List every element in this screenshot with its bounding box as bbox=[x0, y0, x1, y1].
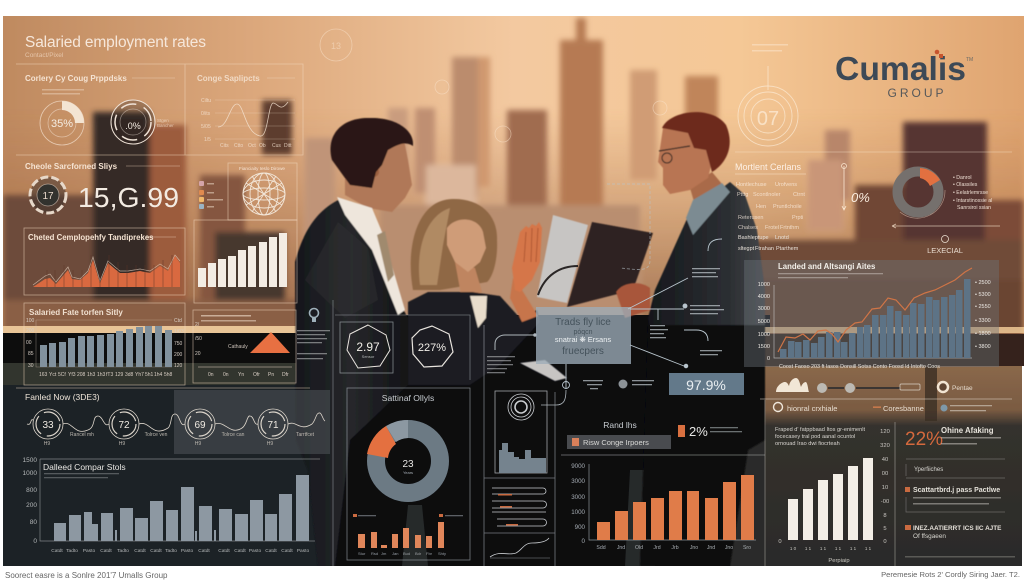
background: blurred city skyline bbox=[3, 16, 1024, 336]
chart: large grey bars: Tadto bbox=[66, 548, 78, 554]
stat: 0% with vertical arrow bbox=[842, 164, 870, 210]
chart: orange triangle: 2/ bbox=[195, 322, 200, 328]
chart: orange bars: Jno bbox=[690, 545, 698, 551]
panel: white bars chart: 5 bbox=[883, 526, 887, 532]
logo: TM bbox=[966, 57, 973, 63]
stat: 22% and text list: 22% bbox=[905, 429, 943, 450]
panel: white bars chart: 320 bbox=[880, 443, 890, 449]
panel: timeline with dials: H9 bbox=[267, 441, 273, 447]
chart: market donut: Sanrsiroi ssian bbox=[957, 205, 991, 211]
icon: bulb and note bbox=[297, 308, 330, 359]
panel: timeline with dials: H9 bbox=[44, 441, 50, 447]
stat: 22% and text list: INEZ.AATIERRT ICS IIC AJTE bbox=[913, 525, 1002, 532]
chart: slate bars: Yct bbox=[49, 372, 57, 378]
chart: orange bars: Rand lhs bbox=[603, 420, 637, 430]
progress rows bbox=[492, 488, 547, 526]
chart: orange triangle: Cathauly bbox=[228, 344, 248, 350]
panel: white bars chart: 8 bbox=[883, 513, 887, 519]
dial: 69 bbox=[185, 409, 215, 439]
icon: dial bbox=[30, 177, 66, 213]
stat: 2.7%: 227% bbox=[418, 342, 446, 354]
dial: 71 bbox=[258, 409, 288, 439]
gauge: 0%: .0% bbox=[125, 121, 141, 131]
legend strip: Coresbanne bbox=[883, 404, 924, 413]
chart: orange triangle: Yn bbox=[238, 372, 244, 378]
panel: donut and small bars: Rsd bbox=[371, 551, 378, 556]
stat: 0% with vertical arrow: 0% bbox=[851, 190, 870, 205]
folder held by the man on the right bbox=[520, 215, 653, 381]
chart: slate bars: 1h4 bbox=[154, 372, 163, 378]
panel: market text table: Bashleptupe bbox=[738, 235, 769, 241]
chart: slate bars: 85 bbox=[28, 351, 34, 357]
chart: line chart top: Ditt bbox=[284, 143, 292, 149]
panel: white bars chart: Fraped d' fatppbaad Itos gr-enimenlt bbox=[775, 427, 865, 433]
chart: donut bbox=[367, 420, 440, 493]
panel: donut gauges bbox=[25, 74, 175, 145]
gauge: 0%: Stgen bbox=[157, 118, 169, 123]
stat: 22% and text list: Yperfiiches bbox=[914, 467, 943, 473]
chart: bar and line combo panel: • 1800 bbox=[975, 331, 991, 337]
chart: orange bars bbox=[561, 420, 765, 551]
chart: market donut bbox=[892, 168, 1000, 255]
chart: orange bars: Jno bbox=[725, 545, 733, 551]
panel: market text table: Ptarthem bbox=[776, 246, 799, 252]
person: man on the left bbox=[295, 118, 413, 566]
footer: note right: Peremesie Rots 2' Cordly Siring Jaer. T2. bbox=[881, 570, 1020, 579]
chart: large grey bars: 0 bbox=[33, 538, 37, 545]
panel: market text table: Frotel bbox=[765, 225, 779, 231]
chart: slate bars: 163 bbox=[39, 372, 48, 378]
gauge: 0%: Bancher bbox=[157, 123, 174, 128]
chart: market donut: LEXECIAL bbox=[927, 246, 963, 255]
panel: market text table: Prpti bbox=[792, 215, 803, 221]
chart: large grey bars: Pasto bbox=[249, 548, 261, 554]
chart: large grey bars: 1000 bbox=[23, 470, 37, 477]
chart: orange bars: Jnd bbox=[617, 545, 625, 551]
panel: donut and small bars: Stur bbox=[358, 551, 366, 556]
panel: white bars chart: 1 1 bbox=[820, 546, 827, 551]
chart: large grey bars: Catdt bbox=[100, 548, 112, 554]
legend and globe bbox=[199, 166, 285, 215]
panel: white bars chart: 1 1 bbox=[865, 546, 872, 551]
panel: timeline with dials: Fanled Now (3DE3) bbox=[25, 392, 100, 402]
chart: slate bars: 5h8 bbox=[164, 372, 173, 378]
gauge: 0% bbox=[111, 100, 174, 144]
chart: market donut: • Danrol bbox=[953, 175, 972, 181]
chart: large grey bars: Pasto bbox=[181, 548, 193, 554]
dial: 72 bbox=[109, 409, 139, 439]
chart: orange bars: Sdd bbox=[596, 545, 606, 551]
panel: top-left frame lines bbox=[16, 64, 310, 388]
chart: bar and line combo panel: Coost Faoso 203 ft lasos Donsill Sotss Conto Foosd ld Intofto Coos bbox=[779, 364, 940, 370]
chart: large grey bars: Catdt bbox=[198, 548, 210, 554]
panel: white bars chart: 1 0 bbox=[790, 546, 797, 551]
panel: big stat bbox=[25, 162, 180, 213]
panel: donut and small bars: Bud bbox=[403, 551, 410, 556]
panel: donut and small bars: Jm bbox=[381, 551, 387, 556]
icon: concentric circle bbox=[508, 394, 534, 420]
chart: slate bars: 1/03 bbox=[174, 329, 184, 335]
chart: slate bars: 1h3 bbox=[87, 372, 96, 378]
chart: slate bars: 1h3 bbox=[97, 372, 106, 378]
chart: slate bars: 5h1 bbox=[145, 372, 154, 378]
panel: market text table: sltegpt bbox=[738, 246, 755, 252]
chart: large grey bars: Catdt bbox=[265, 548, 277, 554]
person: man on the right bbox=[616, 112, 765, 566]
chart: orange triangle: 20 bbox=[195, 351, 201, 357]
chart: orange triangle: Ofr bbox=[253, 372, 260, 378]
legend strip: hionral crxhiale bbox=[787, 404, 837, 413]
icon: faint target with 07 bbox=[738, 44, 798, 146]
panel: central narrow column bbox=[484, 325, 566, 566]
dial: 71: 71 bbox=[267, 420, 279, 431]
dial: 33: 33 bbox=[42, 420, 54, 431]
chart: slate bars: 750 bbox=[174, 341, 183, 347]
chart: bar and line combo panel: • 2550 bbox=[975, 304, 991, 310]
chart: slate bars: 208 bbox=[77, 372, 86, 378]
dial: 33 bbox=[33, 409, 63, 439]
chart: large grey bars: Catdt bbox=[134, 548, 146, 554]
panel: market text table: Scontlnoler bbox=[753, 192, 781, 198]
chart: large grey bars: Dalleed Compar Stols bbox=[43, 462, 126, 472]
decorative faint circles: 13 bbox=[331, 41, 341, 51]
panel: market text table: Urofvens bbox=[775, 182, 797, 188]
stat: 2.97: 2.97 bbox=[356, 340, 380, 354]
chart: market donut: • Olassiles bbox=[953, 182, 978, 188]
panel: market text table: Chalses bbox=[738, 225, 758, 231]
chart: slate bars: 3d8 bbox=[125, 372, 134, 378]
panel: market text table: Pruntlchoile bbox=[773, 204, 802, 210]
chart: orange bars: Jrd bbox=[653, 545, 661, 551]
chart: large grey bars: 800 bbox=[26, 487, 37, 494]
legend strip bbox=[760, 399, 1012, 413]
panel: white bars chart: Perpiaip bbox=[828, 558, 850, 564]
panel: market text table bbox=[735, 152, 1012, 252]
icon row: shapes and toggles: Pentae bbox=[952, 385, 973, 392]
chart: line chart top: Oct bbox=[248, 143, 256, 149]
panel: white bars chart: 0 bbox=[778, 539, 782, 545]
chart: line chart top: Ob bbox=[259, 143, 266, 149]
panel: white bars chart: ornouad Irao dwi fiocrteah bbox=[775, 441, 840, 447]
chart: bar and line combo panel: 3000 bbox=[758, 306, 770, 312]
panel: donut and small bars: Sattinaf Ollyls bbox=[382, 393, 434, 403]
icon: faint target with 07: 07 bbox=[757, 108, 779, 130]
panel: market text table: Ftrahan bbox=[755, 246, 774, 252]
chart: orange bars: Sro bbox=[743, 545, 751, 551]
chart: orange bars: Jnd bbox=[707, 545, 715, 551]
stat: 2.97 bbox=[347, 325, 390, 368]
chart: bar and line combo panel: Landed and Altsangi Aites bbox=[778, 262, 876, 271]
chart: large grey bars bbox=[23, 457, 320, 554]
panel: timeline with dials: H9 bbox=[195, 441, 201, 447]
logo: GROUP bbox=[887, 86, 947, 100]
chart: slate bars: Yf3 bbox=[68, 372, 76, 378]
chart: slate bars: 00 bbox=[26, 340, 32, 346]
chart: slate bars: 129 bbox=[115, 372, 124, 378]
stat box: 97.9% bbox=[669, 373, 744, 395]
chart: bar and line combo panel: 5000 bbox=[758, 319, 770, 325]
legend and globe: Fianciaity Ieslo Dirowe bbox=[239, 166, 285, 171]
chart: orange triangle: Dfr bbox=[282, 372, 289, 378]
panel: timeline with dials: Tolrce can bbox=[222, 432, 245, 438]
panel: white bars chart: -00 bbox=[881, 499, 889, 505]
chart: orange bars: 0 bbox=[582, 538, 586, 545]
chart: large grey bars: 200 bbox=[26, 502, 37, 509]
chart: donut: Years bbox=[403, 470, 413, 475]
chart: orange bars: Old bbox=[635, 545, 643, 551]
chart: line chart top: Ctto bbox=[234, 143, 243, 149]
stat: 2.97: Sensor bbox=[362, 354, 375, 359]
chart: large grey bars: Tadto bbox=[165, 548, 177, 554]
gauge: 35% bbox=[40, 101, 84, 145]
heading: title bbox=[25, 34, 206, 59]
panel: market text table: Hen bbox=[756, 204, 766, 210]
background: dark lower section bbox=[3, 315, 1024, 566]
chart: slate bars: 200 bbox=[26, 328, 35, 334]
chart: large grey bars: Catdt bbox=[150, 548, 162, 554]
chart: orange triangle bbox=[195, 315, 292, 378]
chart: line chart top: 1/5 bbox=[204, 137, 211, 143]
chart: bar and line combo panel: • 3300 bbox=[975, 318, 991, 324]
chart: bar and line combo panel: 4000 bbox=[758, 294, 770, 300]
icon row: shapes and toggles bbox=[776, 378, 973, 393]
decorative faint circles bbox=[320, 29, 667, 142]
chart: orange bars: 3000 bbox=[571, 478, 586, 485]
panel: market text table: Ptttg bbox=[737, 192, 748, 198]
chart: slate bars: Salaried Fate torfen Sitly bbox=[29, 308, 123, 317]
chart: market donut: • Eelatrlemrsse bbox=[953, 190, 988, 196]
chart: bar and line combo panel: • 5300 bbox=[975, 292, 991, 298]
panel: donut and small bars: Shty bbox=[438, 551, 446, 556]
panel: donut and small bars bbox=[347, 388, 470, 560]
chart: white bars bbox=[198, 233, 287, 287]
chart: bar and line combo panel: 1500 bbox=[758, 344, 770, 350]
panel: white bars chart: 1 1 bbox=[805, 546, 812, 551]
stat: 2.7% bbox=[412, 326, 453, 367]
panel: market text table: Reterusen bbox=[738, 215, 763, 221]
chart: orange triangle: 0n bbox=[223, 372, 229, 378]
chart: large grey bars: Catdt bbox=[51, 548, 63, 554]
chart: slate bars: Yh7 bbox=[135, 372, 144, 378]
chart: large grey bars: Pasto bbox=[297, 548, 309, 554]
stat: 22% and text list bbox=[905, 426, 1015, 558]
panel: timeline with dials bbox=[25, 390, 330, 454]
chart: orange bars: 2% bbox=[689, 424, 708, 439]
panel: market text table: Frtnthm bbox=[780, 225, 799, 231]
stat box: 97.9%: 97.9% bbox=[686, 377, 726, 393]
panel: big stat: 15,G.99 bbox=[78, 182, 179, 213]
callout: light info box: fruecpers bbox=[562, 346, 604, 357]
chart: bar and line combo panel: 0 bbox=[767, 356, 770, 362]
chart: slate bars: 30 bbox=[28, 363, 34, 369]
chart: orange bars: Risw Conge Irpoers bbox=[583, 438, 649, 447]
callout: light info box bbox=[536, 307, 631, 364]
callout: light info box: snatrai ❋ Ersans bbox=[555, 335, 611, 344]
chart: orange triangle: /50 bbox=[195, 336, 202, 342]
chart: large grey bars: 80 bbox=[30, 519, 37, 526]
panel: white bars chart: 40 bbox=[882, 457, 888, 463]
chart: bar and line combo panel: • 2500 bbox=[975, 280, 991, 286]
panel: donut and small bars: Fbr bbox=[426, 551, 433, 556]
chart: donut: 23 bbox=[402, 459, 414, 470]
dial: 72: 72 bbox=[118, 420, 130, 431]
panel: white bars chart: 0 bbox=[883, 539, 887, 545]
chart: slate bars: 200 bbox=[174, 352, 183, 358]
panel: white bars chart: 1 1 bbox=[850, 546, 857, 551]
chart: bar and line combo panel: • 3800 bbox=[975, 344, 991, 350]
panel: white bars chart: focecasey tral pod aanal ocuntol bbox=[775, 434, 855, 440]
icon: dial: 17 bbox=[42, 191, 54, 202]
dial: 69: 69 bbox=[194, 420, 206, 431]
chart: bar and line combo panel: 1000 bbox=[758, 282, 770, 288]
callout: light info box: póqcn bbox=[573, 329, 593, 336]
chart: line chart top: Cus bbox=[272, 143, 281, 149]
panel: hexagon stats bbox=[333, 300, 470, 566]
panel: white bars chart: 120 bbox=[880, 429, 890, 435]
chart: orange triangle: Pn bbox=[268, 372, 274, 378]
chart: large grey bars: Catdt bbox=[234, 548, 246, 554]
chart: slate bars: 120 bbox=[174, 363, 183, 369]
person: woman in the centre bbox=[408, 199, 540, 385]
chart: orange bars: 900 bbox=[575, 524, 586, 531]
heading: title: Salaried employment rates bbox=[25, 34, 206, 51]
chart: orange area bbox=[28, 233, 180, 287]
chart: market donut: • Intarstinossie al bbox=[953, 198, 992, 204]
chart: large grey bars: 1500 bbox=[23, 457, 37, 464]
logo bbox=[835, 50, 973, 100]
stat: 22% and text list: Ohine Afaking bbox=[941, 426, 994, 435]
panel: big stat: Cheole Sarcforned Sliys bbox=[25, 162, 118, 171]
chart: orange bars: 9000 bbox=[571, 463, 586, 470]
chart: bar and line combo panel bbox=[744, 260, 999, 370]
chart: large grey bars: Pasto bbox=[83, 548, 95, 554]
chart: slate bars: 100 bbox=[26, 318, 35, 324]
panel: timeline with dials: Tolrce ven bbox=[145, 432, 168, 438]
stat: 22% and text list: Scattartbrd.j pass Pactlwe bbox=[913, 487, 1000, 494]
callout: light info box: Trads fly lice bbox=[555, 317, 611, 328]
panel: market text table: Hontlechuse bbox=[736, 182, 767, 188]
chart: large grey bars: Catdt bbox=[218, 548, 230, 554]
panel: donut gauges: Corlery Cy Coug Prppdsks bbox=[25, 74, 127, 83]
logo: Cumalis bbox=[835, 50, 966, 87]
icon: globe bbox=[243, 173, 285, 215]
gauge: 35%: 35% bbox=[51, 118, 73, 130]
chart: orange bars: Jrb bbox=[671, 545, 679, 551]
chart: bar and line combo panel: 1000 bbox=[758, 332, 770, 338]
panel: white bars chart: 1 1 bbox=[835, 546, 842, 551]
chart: orange bars: 3000 bbox=[571, 494, 586, 501]
chart: line chart top: 5/05 bbox=[201, 124, 211, 130]
chart: orange area: Cheted Cemplopehfy Tandiprekes bbox=[28, 233, 154, 242]
chart: line chart top: Ciltu bbox=[201, 98, 211, 104]
stat: 22% and text list: Of ffsgaeen bbox=[913, 533, 946, 540]
small annotations on the right man bbox=[583, 268, 724, 389]
chart: line chart top bbox=[197, 74, 295, 149]
chart: line chart top: Conge Saplipcts bbox=[197, 74, 260, 83]
chart: line chart top: 0/its bbox=[201, 111, 211, 117]
panel: donut and small bars: Jan bbox=[392, 551, 398, 556]
chart: slate bars: fT3 bbox=[106, 372, 113, 378]
panel: timeline with dials: H9 bbox=[119, 441, 125, 447]
heading: title: Contact/Pixel bbox=[25, 52, 64, 59]
chart: slate bars: 5Cf bbox=[58, 372, 66, 378]
chart: orange bars: 1000 bbox=[571, 509, 586, 516]
panel: market text table: Mortlent Cerlans bbox=[735, 162, 802, 172]
panel: market text table: Ctrnt bbox=[793, 192, 805, 198]
panel: timeline with dials: Tarrtfcet bbox=[296, 432, 315, 438]
panel: market text table: Lnotd bbox=[775, 235, 789, 241]
panel: donut and small bars: Bdr bbox=[415, 551, 422, 556]
chart: orange triangle: 0n bbox=[208, 372, 214, 378]
panel: white bars chart: 10 bbox=[882, 485, 888, 491]
chart: slate bars: Ctd bbox=[174, 318, 182, 324]
chart: large grey bars: Tadto bbox=[117, 548, 129, 554]
icon: raised hand bbox=[512, 222, 542, 292]
chart: slate bars bbox=[26, 308, 184, 378]
panel: timeline with dials: Rancel mh bbox=[70, 432, 94, 438]
chart: line chart top: Cits bbox=[220, 143, 229, 149]
arrows: callout connectors bbox=[538, 184, 722, 388]
chart: large grey bars: Catdt bbox=[281, 548, 293, 554]
panel: white bars chart bbox=[765, 400, 895, 566]
panel: white bars chart: 00 bbox=[882, 471, 888, 477]
footer: source left: Soorect easre is a Sonlre 201'7 Umalls Group bbox=[5, 571, 168, 580]
